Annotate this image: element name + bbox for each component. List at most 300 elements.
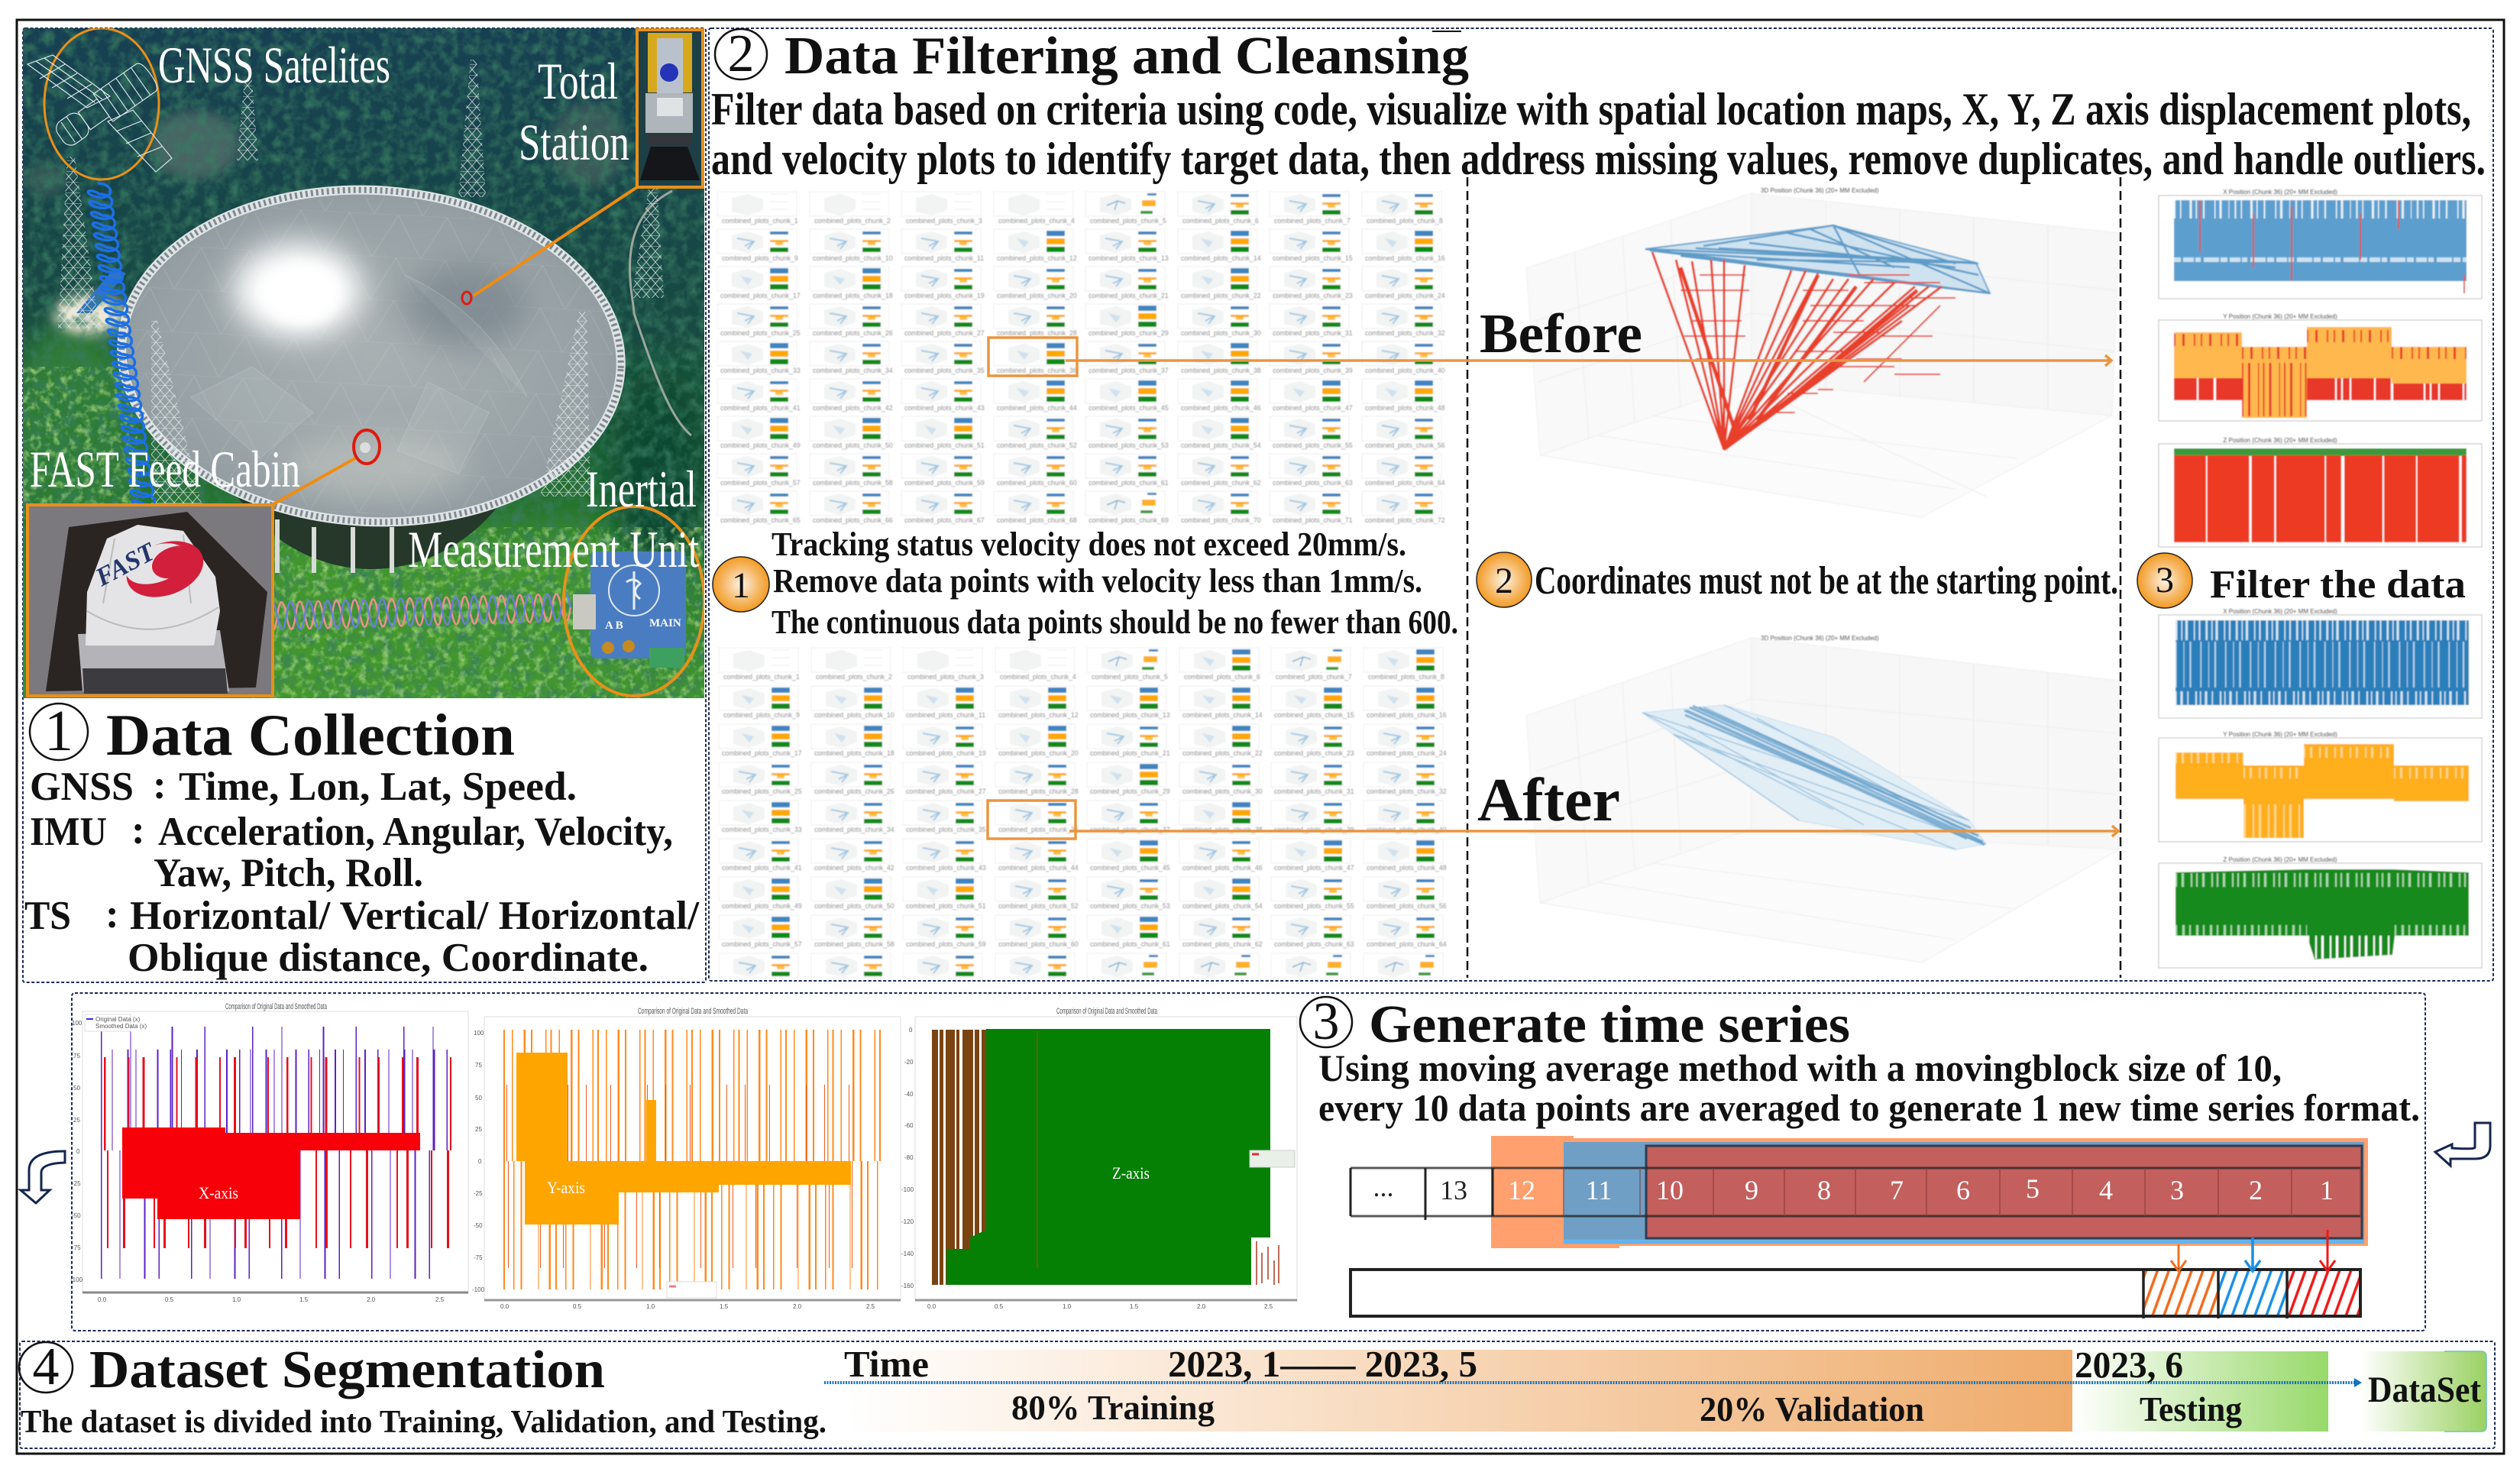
timeline: dataset box	[2360, 1351, 2486, 1432]
label: training date range: 2023, 1—— 2023, 5	[1168, 1343, 1477, 1385]
thumbnail grid: after: combined_plots_chunk_57	[722, 940, 802, 948]
chart: Z-axis comparison: -40	[904, 1091, 914, 1098]
diagram: moving window over cells: 5	[2026, 1173, 2040, 1204]
thumbnail grid: before: combined_plots_chunk_8	[1367, 217, 1443, 225]
thumbnail grid: after: combined_plots_chunk_39	[1274, 826, 1354, 833]
thumbnail grid: before: combined_plots_chunk_9	[722, 254, 798, 262]
chart: raw X motion: X Position (Chunk 36) (20+ MM Excluded)	[2223, 189, 2337, 196]
chart: X-axis comparison: 0.5	[165, 1296, 174, 1303]
diagram: moving window over cells: ...	[1373, 1172, 1393, 1202]
feed cabin inset	[27, 505, 273, 696]
chart: X-axis comparison: -100	[70, 1276, 83, 1283]
chart: Z-axis comparison	[901, 1007, 1297, 1310]
thumbnail grid: after: combined_plots_chunk_28	[998, 788, 1079, 795]
thumbnail grid: before: combined_plots_chunk_29	[1089, 329, 1169, 337]
thumbnail grid: after: combined_plots_chunk_62	[1182, 940, 1263, 948]
thumbnail grid: after: combined_plots_chunk_45	[1090, 864, 1170, 872]
thumbnail grid: before: combined_plots_chunk_20	[997, 292, 1077, 299]
thumbnail grid: before: combined_plots_chunk_16	[1365, 254, 1445, 262]
heading: Dataset Segmentation: 4	[32, 1338, 60, 1396]
arrow: after link	[988, 801, 2118, 839]
thumbnail grid: before: combined_plots_chunk_36	[997, 367, 1077, 374]
chart: X-axis comparison: -75	[72, 1244, 81, 1251]
description: moving average	[1318, 1047, 2420, 1129]
label: 80% Training: 80% Training	[1011, 1388, 1215, 1427]
chart: Z-axis comparison: -60	[904, 1122, 914, 1129]
thumbnail grid: after: combined_plots_chunk_22	[1182, 749, 1263, 757]
text: sensor fields	[24, 763, 700, 980]
chart: Y-axis comparison: -50	[474, 1222, 483, 1229]
IMU callout	[564, 506, 704, 696]
thumbnail grid: before: combined_plots_chunk_6	[1182, 217, 1259, 225]
chart: Z-axis comparison: Z-axis	[1112, 1163, 1150, 1182]
label: FAST Feed Cabin: FAST Feed Cabin	[30, 440, 300, 498]
arrow: flow from the right	[2435, 1123, 2490, 1166]
diagram: moving window over cells: 9	[1745, 1175, 1758, 1205]
label: 2023, 6: 2023, 6	[2075, 1344, 2183, 1386]
chart: Y-axis comparison: -25	[474, 1190, 483, 1197]
thumbnail grid: after: combined_plots_chunk_27	[906, 788, 986, 795]
text: sensor fields: Yaw, Pitch, Roll.	[154, 851, 423, 895]
chart: Y-axis comparison: -75	[474, 1254, 483, 1261]
3D plot: before: 3D Position (Chunk 36) (20+ MM Excluded)	[1761, 187, 1879, 194]
thumbnail grid: before: combined_plots_chunk_57	[720, 479, 801, 487]
chart: X-axis comparison: 0	[76, 1148, 80, 1155]
chart: Y-axis comparison: 50	[475, 1095, 482, 1102]
thumbnail grid: after: combined_plots_chunk_8	[1368, 673, 1444, 681]
3D plot: after: 3D Position (Chunk 36) (20+ MM Excluded)	[1761, 635, 1879, 642]
thumbnail grid: before: combined_plots_chunk_11	[904, 254, 984, 262]
thumbnail grid: before: combined_plots_chunk_67	[904, 516, 985, 524]
thumbnail grid: before: combined_plots_chunk_23	[1273, 292, 1353, 299]
thumbnail grid: before: combined_plots_chunk_21	[1089, 292, 1169, 299]
thumbnail grid: after: combined_plots_chunk_21	[1090, 749, 1170, 757]
thumbnail grid: before: combined_plots_chunk_26	[813, 329, 893, 337]
thumbnail grid: before: combined_plots_chunk_33	[720, 367, 801, 374]
badge 1: 1	[732, 565, 750, 606]
timeline: testing span	[2072, 1351, 2328, 1432]
diagram: moving window over cells: 8	[1817, 1175, 1831, 1205]
badge 1	[713, 557, 769, 612]
criteria text: Remove data points with velocity less than 1mm/s.	[773, 562, 1422, 600]
thumbnail grid: before: combined_plots_chunk_65	[720, 516, 801, 524]
label: Inertial: Inertial	[586, 460, 697, 518]
thumbnail grid: after: combined_plots_chunk_3	[907, 673, 984, 681]
chart: X-axis comparison: 50	[73, 1085, 80, 1092]
GNSS signal helix	[88, 183, 156, 518]
chart: X-axis comparison	[70, 1002, 468, 1303]
thumbnail grid: after: combined_plots_chunk_12	[998, 711, 1079, 719]
label: Filter the data: Filter the data	[2210, 563, 2466, 607]
diagram: output series bar	[1351, 1230, 2360, 1318]
thumbnail grid: before: combined_plots_chunk_72	[1365, 516, 1445, 524]
thumbnail grid: after: combined_plots_chunk_35	[906, 826, 986, 833]
IMU signal helix	[258, 594, 571, 630]
thumbnail grid: after: combined_plots_chunk_63	[1274, 940, 1354, 948]
thumbnail grid: before: combined_plots_chunk_44	[997, 404, 1077, 412]
label: 20% Validation: 20% Validation	[1700, 1390, 1924, 1428]
thumbnail grid: after: combined_plots_chunk_16	[1367, 711, 1447, 719]
timeline arrow	[824, 1378, 2362, 1387]
thumbnail grid: before: combined_plots_chunk_3	[906, 217, 982, 225]
chart: raw Z motion	[2159, 437, 2482, 547]
label: Testing: Testing	[2140, 1390, 2242, 1428]
thumbnail grid: before: combined_plots_chunk_19	[904, 292, 985, 299]
timeline: training and validation span	[845, 1350, 2072, 1432]
diagram: moving window over cells: 4	[2099, 1175, 2113, 1205]
thumbnail grid: after: combined_plots_chunk_25	[722, 788, 802, 795]
chart: Y-axis comparison: -100	[472, 1286, 485, 1293]
text: sensor fields: :	[131, 808, 145, 852]
panel: dataset segmentation	[19, 1338, 2495, 1448]
chart: raw Y motion: Y Position (Chunk 36) (20+ MM Excluded)	[2223, 313, 2337, 320]
thumbnail grid: before: combined_plots_chunk_5	[1090, 217, 1166, 225]
thumbnail grid: before: combined_plots_chunk_14	[1181, 254, 1261, 262]
thumbnail grid: after: combined_plots_chunk_9	[723, 711, 800, 719]
thumbnail grid: before: combined_plots_chunk_51	[904, 442, 985, 449]
label: After: After	[1477, 767, 1620, 834]
thumbnail grid: before: combined_plots_chunk_54	[1181, 442, 1261, 449]
chart: Y-axis comparison: 1.0	[646, 1303, 655, 1310]
thumbnail grid: before: combined_plots_chunk_58	[813, 479, 893, 487]
heading: Data Collection: 1	[44, 699, 73, 763]
badge 2	[1477, 552, 1532, 607]
IMU callout: A B	[605, 620, 623, 632]
heading: Data Collection: Data Collection	[106, 702, 515, 768]
chart: Z-axis comparison: 2.5	[1264, 1303, 1273, 1310]
thumbnail grid: after: combined_plots_chunk_13	[1090, 711, 1170, 719]
diagram: moving window over cells	[1351, 1136, 2368, 1248]
chart: filtered X motion: X Position (Chunk 36) (20+ MM Excluded)	[2223, 608, 2337, 615]
thumbnail grid: after: combined_plots_chunk_26	[814, 788, 894, 795]
thumbnail grid: before: combined_plots_chunk_4	[998, 217, 1075, 225]
chart: X-axis comparison: Comparison of Original Data and Smoothed Data	[225, 1002, 327, 1011]
chart: Z-axis comparison: Comparison of Original Data and Smoothed Data	[1056, 1007, 1157, 1016]
thumbnail grid: before: combined_plots_chunk_40	[1365, 367, 1445, 374]
chart: X-axis comparison: 1.0	[232, 1296, 241, 1303]
chart: filtered Z motion: Z Position (Chunk 36) (20+ MM Excluded)	[2223, 856, 2337, 863]
supports beneath the dish	[238, 497, 497, 573]
diagram: moving window over cells: 2	[2249, 1175, 2263, 1205]
thumbnail grid: after: combined_plots_chunk_5	[1092, 673, 1168, 681]
chart: Z-axis comparison: -140	[901, 1250, 914, 1257]
thumbnail grid: after: combined_plots_chunk_19	[906, 749, 986, 757]
heading: Generate time series: Generate time series	[1369, 995, 1850, 1054]
thumbnail grid: before: combined_plots_chunk_2	[814, 217, 891, 225]
thumbnail grid: after: combined_plots_chunk_54	[1182, 902, 1263, 910]
thumbnail grid: before: combined_plots_chunk_38	[1181, 367, 1261, 374]
chart: filtered Z motion	[2159, 856, 2482, 968]
chart: Z-axis comparison: 2.0	[1197, 1303, 1206, 1310]
thumbnail grid: before: combined_plots_chunk_25	[720, 329, 801, 337]
heading: Data Filtering and Cleansing: 2	[727, 24, 755, 83]
total station inset	[637, 30, 703, 187]
thumbnail grid: before: combined_plots_chunk_30	[1181, 329, 1261, 337]
thumbnail grid: before: combined_plots_chunk_35	[904, 367, 985, 374]
chart: raw Z motion: Z Position (Chunk 36) (20+ MM Excluded)	[2223, 437, 2337, 444]
chart: Z-axis comparison: 0	[909, 1027, 913, 1034]
thumbnail grid: before: combined_plots_chunk_53	[1089, 442, 1169, 449]
thumbnail grid: before: combined_plots_chunk_42	[813, 404, 893, 412]
label: Measurement Unit: Measurement Unit	[408, 520, 699, 578]
chart: X-axis comparison: 75	[73, 1053, 80, 1060]
diagram: moving window over cells: 12	[1508, 1175, 1535, 1205]
timeline: dataset box: DataSet	[2368, 1370, 2481, 1410]
thumbnail grid: after: combined_plots_chunk_42	[814, 864, 894, 872]
thumbnail grid: before: combined_plots_chunk_47	[1273, 404, 1353, 412]
thumbnail grid: after: combined_plots_chunk_29	[1090, 788, 1170, 795]
diagram: moving window over cells: 10	[1656, 1175, 1684, 1205]
thumbnail grid: before: combined_plots_chunk_66	[813, 516, 893, 524]
criterion: coordinates: Coordinates must not be at the starting point.	[1535, 559, 2118, 603]
3D plot: before	[1526, 187, 2119, 517]
thumbnail grid: after: combined_plots_chunk_50	[814, 902, 894, 910]
chart: Z-axis comparison: 0.0	[927, 1303, 937, 1310]
thumbnail grid: after: combined_plots_chunk_23	[1274, 749, 1354, 757]
thumbnail grid: before: combined_plots_chunk_10	[813, 254, 893, 262]
thumbnail grid: after: combined_plots_chunk_61	[1090, 940, 1170, 948]
text: sensor fields: TS	[24, 894, 71, 938]
thumbnail grid: before: combined_plots_chunk_37	[1089, 367, 1169, 374]
thumbnail grid: after: combined_plots_chunk_20	[998, 749, 1079, 757]
orange leader to total station	[462, 187, 637, 304]
arrow: flow to the left panel	[21, 1151, 65, 1203]
thumbnail grid: before: combined_plots_chunk_60	[997, 479, 1077, 487]
thumbnail grid: before: combined_plots_chunk_49	[720, 442, 801, 449]
thumbnail grid: after: combined_plots_chunk_4	[1000, 673, 1076, 681]
chart: X-axis comparison: -50	[72, 1212, 81, 1219]
thumbnail grid: after: combined_plots_chunk_48	[1367, 864, 1447, 872]
badge 3: 3	[2156, 560, 2174, 600]
diagram: moving window over cells: 11	[1586, 1175, 1612, 1205]
heading: Dataset Segmentation: Dataset Segmentation	[89, 1341, 605, 1399]
thumbnail grid: before: combined_plots_chunk_69	[1089, 516, 1169, 524]
dish reflector	[113, 177, 629, 535]
arrow: before link	[988, 338, 2111, 376]
badge 2: 2	[1495, 561, 1513, 601]
thumbnail grid: before: combined_plots_chunk_68	[997, 516, 1077, 524]
thumbnail grid: after: combined_plots_chunk_11	[906, 711, 985, 719]
thumbnail grid: before: combined_plots_chunk_59	[904, 479, 985, 487]
thumbnail grid: before: combined_plots_chunk_52	[997, 442, 1077, 449]
thumbnail grid: after: combined_plots_chunk_37	[1090, 826, 1170, 833]
thumbnail grid: after: combined_plots_chunk_33	[722, 826, 802, 833]
thumbnail grid: before: combined_plots_chunk_32	[1365, 329, 1445, 337]
thumbnail grid: before: combined_plots_chunk_27	[904, 329, 985, 337]
criteria text: Tracking status velocity does not exceed 20mm/s.	[772, 526, 1406, 563]
criteria text	[772, 526, 1458, 641]
chart: Z-axis comparison: 0.5	[995, 1303, 1004, 1310]
thumbnail grid: before: combined_plots_chunk_28	[997, 329, 1077, 337]
thumbnail grid: before: combined_plots_chunk_50	[813, 442, 893, 449]
thumbnail grid: after: combined_plots_chunk_44	[998, 864, 1079, 872]
thumbnail grid: before: combined_plots_chunk_56	[1365, 442, 1445, 449]
chart: Y-axis comparison: Y-axis	[547, 1178, 585, 1197]
photo: FAST telescope with sensors	[4, 28, 714, 718]
thumbnail grid: after: combined_plots_chunk_1	[723, 673, 800, 681]
thumbnail grid: after: combined_plots_chunk_43	[906, 864, 986, 872]
thumbnail grid: after: combined_plots_chunk_40	[1367, 826, 1447, 833]
thumbnail grid: before: combined_plots_chunk_22	[1181, 292, 1261, 299]
chart: Y-axis comparison: 2.0	[793, 1303, 802, 1310]
chart: Y-axis comparison: 2.5	[866, 1303, 875, 1310]
chart: raw X motion	[2159, 189, 2482, 299]
thumbnail grid: after: combined_plots_chunk_56	[1367, 902, 1447, 910]
thumbnail grid: before: combined_plots_chunk_45	[1089, 404, 1169, 412]
thumbnail grid: before: combined_plots_chunk_63	[1273, 479, 1353, 487]
diagram: moving window over cells: 13	[1440, 1175, 1467, 1205]
thumbnail grid: before: combined_plots_chunk_39	[1273, 367, 1353, 374]
description	[711, 84, 2486, 184]
chart: X-axis comparison: X-axis	[199, 1183, 238, 1202]
thumbnail grid: after: combined_plots_chunk_7	[1276, 673, 1352, 681]
3D plot: after	[1526, 635, 2119, 962]
thumbnail grid: after: combined_plots_chunk_41	[722, 864, 802, 872]
chart: filtered X motion	[2159, 608, 2482, 718]
thumbnail grid: before: combined_plots_chunk_62	[1181, 479, 1261, 487]
chart: Y-axis comparison: Comparison of Original Data and Smoothed Data	[638, 1007, 749, 1016]
thumbnail grid: after: combined_plots_chunk_17	[722, 749, 802, 757]
chart: X-axis comparison: -25	[72, 1180, 81, 1187]
thumbnail grid: after: combined_plots_chunk_2	[816, 673, 892, 681]
label: Station: Station	[519, 113, 629, 171]
text: sensor fields: Oblique distance, Coordinate.	[128, 936, 649, 980]
label: Total: Total	[538, 52, 618, 110]
thumbnail grid: after: combined_plots_chunk_46	[1182, 864, 1263, 872]
thumbnail grid: before: combined_plots_chunk_70	[1181, 516, 1261, 524]
chart: X-axis comparison: 2.0	[367, 1296, 376, 1303]
thumbnail grid: after: combined_plots_chunk_51	[906, 902, 986, 910]
thumbnail grid: after: combined_plots_chunk_55	[1274, 902, 1354, 910]
thumbnail grid: after: combined_plots_chunk_34	[814, 826, 894, 833]
thumbnail grid: before: combined_plots_chunk_15	[1273, 254, 1353, 262]
thumbnail grid: before: combined_plots_chunk_71	[1273, 516, 1353, 524]
feed cabin inset: FAST	[91, 537, 160, 593]
chart: X-axis comparison: 0.0	[98, 1296, 107, 1303]
description: moving average: every 10 data points are averaged to generate 1 new time series format.	[1318, 1086, 2420, 1129]
description: dataset split: The dataset is divided into Training, Validation, and Testing.	[21, 1405, 827, 1440]
text: sensor fields: :	[105, 892, 119, 937]
thumbnail grid: before: combined_plots_chunk_64	[1365, 479, 1445, 487]
thumbnail grid: before: combined_plots_chunk_24	[1365, 292, 1445, 299]
thumbnail grid: after: combined_plots_chunk_14	[1182, 711, 1263, 719]
thumbnail grid: after	[719, 648, 1447, 978]
chart: Y-axis comparison: 75	[475, 1062, 482, 1069]
thumbnail grid: after: combined_plots_chunk_49	[722, 902, 802, 910]
dashed separators	[1467, 177, 2120, 978]
panel: data collection	[4, 28, 714, 982]
description: moving average: Using moving average method with a movingblock size of 10,	[1318, 1047, 2282, 1089]
chart: Y-axis comparison	[472, 1007, 901, 1310]
text: sensor fields: GNSS	[30, 765, 134, 809]
label: GNSS Satelites: GNSS Satelites	[158, 36, 390, 94]
heading: Data Filtering and Cleansing: Data Filtering and Cleansing	[784, 27, 1469, 86]
chart: Z-axis comparison: -160	[901, 1283, 914, 1289]
criteria text: The continuous data points should be no fewer than 600.	[772, 603, 1458, 641]
label: Before: Before	[1480, 302, 1642, 364]
thumbnail grid: before: combined_plots_chunk_1	[722, 217, 798, 225]
diagram: moving window over cells: 1	[2320, 1175, 2334, 1205]
chart: Z-axis comparison: 1.5	[1130, 1303, 1139, 1310]
panel: generate time series	[21, 992, 2490, 1331]
thumbnail grid: before: combined_plots_chunk_41	[720, 404, 801, 412]
thumbnail grid: before: combined_plots_chunk_43	[904, 404, 985, 412]
orange leader to feed cabin	[272, 430, 380, 505]
chart: X-axis comparison: 25	[73, 1117, 80, 1124]
text: sensor fields: IMU	[30, 810, 107, 854]
thumbnail grid: after: combined_plots_chunk_30	[1182, 788, 1263, 795]
chart: Y-axis comparison: 0.5	[573, 1303, 582, 1310]
chart: X-axis comparison: Original Data (x)	[95, 1016, 141, 1023]
thumbnail grid: after: combined_plots_chunk_31	[1274, 788, 1354, 795]
thumbnail grid: before: combined_plots_chunk_55	[1273, 442, 1353, 449]
thumbnail grid: after: combined_plots_chunk_15	[1274, 711, 1354, 719]
diagram: moving window over cells: 7	[1890, 1175, 1904, 1205]
satellite callout	[27, 28, 172, 180]
chart: raw Y motion	[2159, 313, 2482, 421]
thumbnail grid: after: combined_plots_chunk_64	[1367, 940, 1447, 948]
thumbnail grid: after: combined_plots_chunk_38	[1182, 826, 1263, 833]
thumbnail grid: after: combined_plots_chunk_60	[998, 940, 1079, 948]
thumbnail grid: before: combined_plots_chunk_18	[813, 292, 893, 299]
chart: Y-axis comparison: 0.0	[500, 1303, 509, 1310]
thumbnail grid: before: combined_plots_chunk_7	[1274, 217, 1351, 225]
thumbnail grid: before: combined_plots_chunk_13	[1089, 254, 1169, 262]
chart: Z-axis comparison: -80	[904, 1154, 914, 1161]
thumbnail grid: after: combined_plots_chunk_18	[814, 749, 894, 757]
text: sensor fields: Acceleration, Angular, Velocity,	[158, 810, 673, 854]
chart: X-axis comparison: 100	[72, 1020, 82, 1027]
thumbnail grid: after: combined_plots_chunk_32	[1367, 788, 1447, 795]
chart: Y-axis comparison: 25	[475, 1126, 482, 1133]
thumbnail grid: after: combined_plots_chunk_6	[1184, 673, 1260, 681]
diagram: moving window over cells: 6	[1956, 1175, 1970, 1205]
thumbnail grid: before: combined_plots_chunk_31	[1273, 329, 1353, 337]
chart: Z-axis comparison: -100	[901, 1186, 914, 1193]
chart: filtered Y motion	[2159, 731, 2482, 842]
text: sensor fields: :	[153, 763, 167, 807]
diagram: moving window over cells: 3	[2170, 1175, 2184, 1205]
thumbnail grid: after: combined_plots_chunk_36	[998, 826, 1079, 833]
chart: Y-axis comparison: 0	[478, 1158, 482, 1165]
chart: X-axis comparison: Smoothed Data (x)	[95, 1023, 147, 1030]
chart: filtered Y motion: Y Position (Chunk 36) (20+ MM Excluded)	[2223, 731, 2337, 738]
panel: data filtering and cleansing	[709, 24, 2493, 981]
thumbnail grid: after: combined_plots_chunk_58	[814, 940, 894, 948]
chart: Z-axis comparison: -120	[901, 1218, 914, 1225]
heading: Generate time series: 3	[1312, 992, 1340, 1051]
thumbnail grid: after: combined_plots_chunk_52	[998, 902, 1079, 910]
chart: Y-axis comparison: 1.5	[720, 1303, 729, 1310]
IMU callout: MAIN	[649, 617, 681, 629]
thumbnail grid: before: combined_plots_chunk_61	[1089, 479, 1169, 487]
thumbnail grid: before: combined_plots_chunk_48	[1365, 404, 1445, 412]
chart: X-axis comparison: 2.5	[435, 1296, 445, 1303]
thumbnail grid: after: combined_plots_chunk_10	[814, 711, 894, 719]
chart: Z-axis comparison: 1.0	[1063, 1303, 1072, 1310]
thumbnail grid: after: combined_plots_chunk_24	[1367, 749, 1447, 757]
text: sensor fields: Horizontal/ Vertical/ Horizontal/	[130, 894, 700, 938]
thumbnail grid: before	[717, 192, 1445, 524]
chart: Y-axis comparison: 100	[474, 1030, 484, 1037]
text: sensor fields: Time, Lon, Lat, Speed.	[179, 765, 577, 809]
badge 3	[2137, 553, 2192, 608]
thumbnail grid: after: combined_plots_chunk_53	[1090, 902, 1170, 910]
thumbnail grid: before: combined_plots_chunk_34	[813, 367, 893, 374]
thumbnail grid: before: combined_plots_chunk_12	[997, 254, 1077, 262]
thumbnail grid: after: combined_plots_chunk_59	[906, 940, 986, 948]
chart: X-axis comparison: 1.5	[299, 1296, 309, 1303]
